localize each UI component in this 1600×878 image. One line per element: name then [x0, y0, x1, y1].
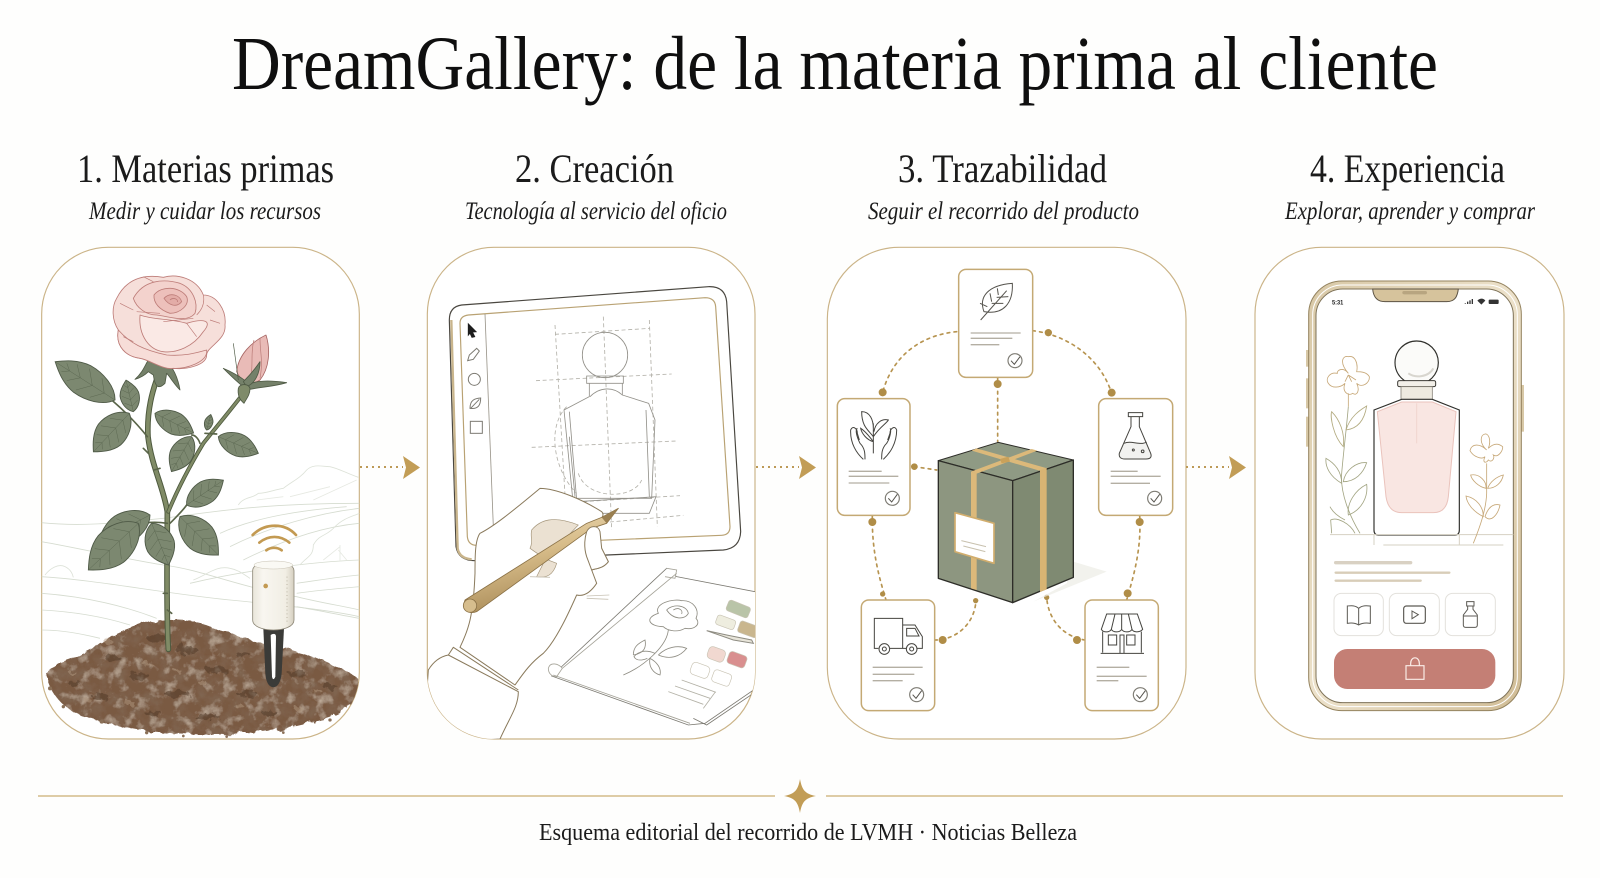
button: buy — [1334, 649, 1495, 689]
floral drawing left — [1326, 356, 1369, 533]
step 4 heading: 4. Experiencia — [1310, 146, 1505, 191]
perfume bottle — [1330, 341, 1513, 545]
step 3 heading: Seguir el recorrido del producto — [868, 198, 1139, 225]
panel: creación — [423, 247, 763, 743]
arrow: step 2 to 3 — [756, 456, 816, 479]
sketch: bottle outline — [564, 332, 656, 513]
icon: wireless signal — [253, 526, 296, 550]
tablet toolbar icons — [468, 324, 482, 433]
panel: experiencia — [1255, 247, 1564, 739]
stylus — [463, 508, 618, 613]
illustration: soil sensor — [253, 561, 294, 687]
illustration: rose bloom — [113, 276, 225, 390]
illustration: soil mound — [45, 620, 357, 738]
button: video — [1389, 593, 1439, 636]
illustration: smartphone — [1306, 281, 1524, 711]
illustration: tablet — [449, 287, 741, 561]
card: retail store — [1085, 600, 1158, 711]
illustration: rose stems — [112, 375, 243, 649]
button: guide — [1334, 593, 1383, 636]
arrow: step 3 to 4 — [1186, 456, 1246, 479]
title: DreamGallery: de la materia prima al cliente — [232, 22, 1438, 106]
product text lines — [1336, 563, 1449, 581]
step 2 heading: 2. Creación — [515, 146, 674, 191]
footer credit: Esquema editorial del recorrido de LVMH · Noticias Belleza — [539, 820, 1077, 846]
step 3 heading — [868, 146, 1139, 225]
illustration: sketchbook — [548, 568, 763, 725]
step 2 heading — [465, 146, 727, 225]
button: product — [1445, 593, 1495, 636]
panel: materias primas — [42, 247, 359, 739]
step 1 heading: Medir y cuidar los recursos — [88, 198, 321, 225]
step 4 heading — [1284, 146, 1535, 225]
card: cultivation — [837, 399, 910, 515]
illustration: landscape — [42, 466, 359, 638]
illustration: rose bud — [223, 335, 287, 403]
step 3 heading: 3. Trazabilidad — [898, 146, 1107, 191]
sketch: bottle construction lines — [532, 317, 683, 530]
card: origin leaf — [959, 269, 1033, 377]
sketch: rose drawing — [623, 600, 698, 675]
panel: trazabilidad — [827, 247, 1186, 739]
step 4 heading: Explorar, aprender y comprar — [1284, 198, 1535, 225]
floral drawing right — [1466, 434, 1503, 543]
illustration: packaged product box — [938, 442, 1107, 603]
phone notch — [1373, 289, 1458, 302]
card: transport — [861, 600, 935, 711]
footer divider with star — [38, 779, 1563, 813]
illustration: hand holding pen — [423, 488, 618, 743]
card: laboratory — [1099, 399, 1173, 515]
traceability connectors — [868, 329, 1144, 644]
arrow: step 1 to 2 — [360, 456, 420, 479]
step 1 heading — [77, 146, 334, 225]
phone status bar: 5:31 — [1332, 300, 1344, 307]
swatches — [689, 599, 760, 687]
illustration: rose leaves — [47, 348, 263, 583]
phone status bar — [1332, 299, 1499, 307]
step 1 heading: 1. Materias primas — [77, 146, 334, 191]
step 2 heading: Tecnología al servicio del oficio — [465, 198, 727, 225]
